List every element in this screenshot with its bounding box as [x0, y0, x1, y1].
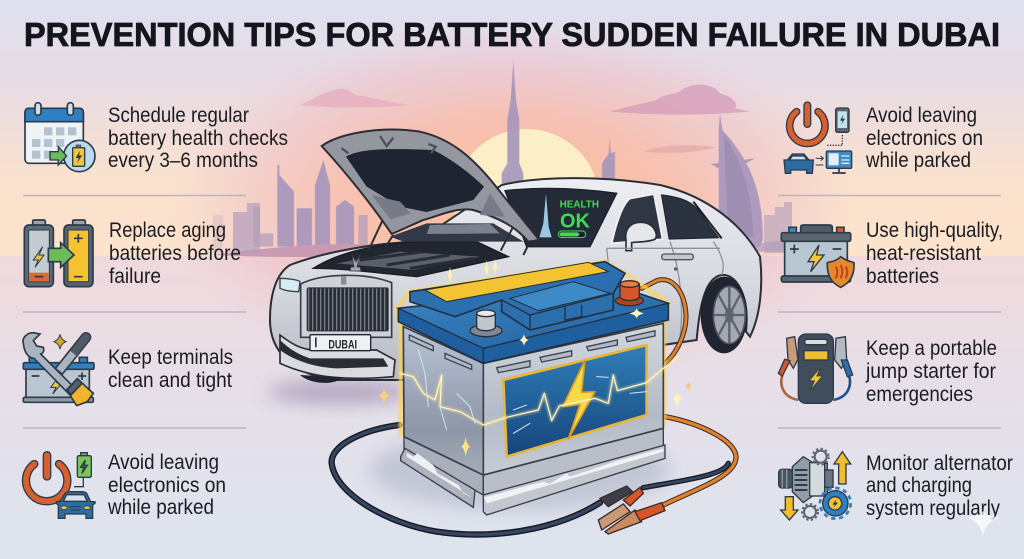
text: keep terminals clean: clean and tight: [108, 368, 232, 392]
text: replace aging batteries: [109, 218, 241, 288]
left tip 2: [24, 218, 241, 288]
open hood: [322, 130, 539, 242]
watermark sparkle: [966, 511, 1001, 535]
text: portable jump starter: [865, 336, 997, 406]
sparkles: [377, 308, 692, 457]
icon: wrench, brush and battery: [23, 333, 94, 406]
license plate: DUBAI: [328, 338, 357, 352]
heartbeat lightning line: [400, 350, 678, 433]
text: schedule regular checks: battery health checks: [108, 126, 288, 150]
text: high quality batteries: Use high-quality,: [866, 218, 1003, 242]
text: avoid leaving electronics: while parked: [865, 148, 971, 172]
car shadow: [268, 380, 412, 404]
vents: [409, 331, 655, 373]
hood struts: [368, 217, 528, 255]
car body: [270, 178, 761, 380]
battery shadow on floor: [370, 430, 670, 510]
bumper lower: [280, 335, 395, 378]
text: monitor alternator: and charging: [866, 473, 972, 497]
car: [270, 130, 761, 380]
icon: power, battery and car: [26, 452, 95, 518]
headlight: [280, 278, 300, 292]
text: avoid leaving electronics: Avoid leaving: [866, 103, 977, 127]
positive terminal: [615, 281, 643, 306]
icon: portable jump starter: [778, 334, 853, 403]
icon: calendar with battery: [25, 103, 95, 172]
right tip 1: [784, 102, 983, 173]
city towers: [213, 61, 793, 257]
text: avoid leaving electronics: [865, 103, 983, 172]
text: avoid leaving electronics: electronics on: [108, 473, 226, 497]
text: keep terminals clean: Keep terminals: [108, 345, 233, 369]
icon: old and new battery: [24, 220, 93, 287]
left tip 3: [23, 333, 233, 406]
outer glow: [397, 262, 668, 437]
cables: [332, 280, 736, 535]
battery illustration: [332, 262, 736, 535]
left side skyline continuation: [213, 203, 260, 253]
right tip 4: [779, 449, 1013, 520]
text: avoid leaving electronics: [107, 450, 226, 519]
right face: [483, 323, 663, 475]
text: replace aging batteries: batteries before: [109, 241, 241, 265]
text: portable jump starter: jump starter for: [865, 359, 996, 383]
text: replace aging batteries: Replace aging: [109, 218, 226, 242]
cover panel: [510, 282, 610, 311]
lower body: [404, 428, 663, 495]
base flange right: [483, 445, 665, 515]
sun: [454, 129, 599, 274]
clouds: [300, 85, 750, 115]
right side skyline continuation: [764, 202, 792, 253]
mirror: [626, 222, 656, 251]
right tip 3: [778, 334, 997, 406]
engine bay: [313, 223, 523, 277]
tip dividers: [23, 196, 1001, 428]
text: high quality batteries: heat-resistant: [866, 241, 981, 265]
text: monitor alternator: [866, 451, 1013, 520]
dubai skyline illustration: [213, 61, 793, 274]
text: schedule regular checks: every 3–6 months: [108, 148, 258, 172]
left face: [403, 327, 483, 475]
text: avoid leaving electronics: electronics on: [866, 126, 983, 150]
left tip 4: [26, 450, 226, 519]
windshield with health display: HEALTH: [560, 199, 599, 210]
yellow strip: [425, 262, 608, 302]
base flange left: [401, 448, 475, 507]
door lines and handle: [607, 242, 723, 347]
text: monitor alternator: system regularly: [866, 496, 1000, 520]
title: PREVENTION TIPS FOR BATTERY SUDDEN FAILURE IN DUBAI: [24, 16, 1000, 53]
text: portable jump starter: Keep a portable: [866, 336, 997, 360]
rear wheel: [701, 277, 747, 353]
windshield with health display: OK: [560, 209, 590, 232]
spirit ornament: [350, 255, 361, 271]
negative terminal: [470, 310, 502, 337]
lower lid: [398, 285, 668, 363]
icon: heat resistant battery: [781, 225, 854, 287]
icon: alternator, gears and arrows: [779, 449, 851, 520]
icon: power, phone, car and monitor: [784, 102, 852, 173]
front label panel: [503, 345, 647, 457]
text: schedule regular checks: [108, 103, 288, 172]
engine sparks: [447, 258, 498, 284]
car front grille and plate: [280, 275, 395, 383]
text: high quality batteries: batteries: [866, 264, 939, 288]
side windows: [612, 194, 663, 243]
text: portable jump starter: emergencies: [866, 382, 973, 406]
raised cover: [410, 262, 625, 330]
lightning bolt: [563, 360, 595, 439]
badge and hood ornament: [341, 276, 346, 285]
text: avoid leaving electronics: while parked: [107, 495, 214, 519]
left tip 1: [25, 103, 288, 172]
windshield with health display: [505, 188, 617, 247]
text: replace aging batteries: failure: [109, 264, 161, 288]
clamps: [598, 486, 665, 534]
right tip 2: [781, 218, 1003, 288]
text: keep terminals clean: [108, 345, 233, 392]
text: schedule regular checks: Schedule regular: [108, 103, 249, 127]
grille frame: [301, 275, 392, 337]
text: high quality batteries: [866, 218, 1003, 288]
text: avoid leaving electronics: Avoid leaving: [108, 450, 219, 474]
